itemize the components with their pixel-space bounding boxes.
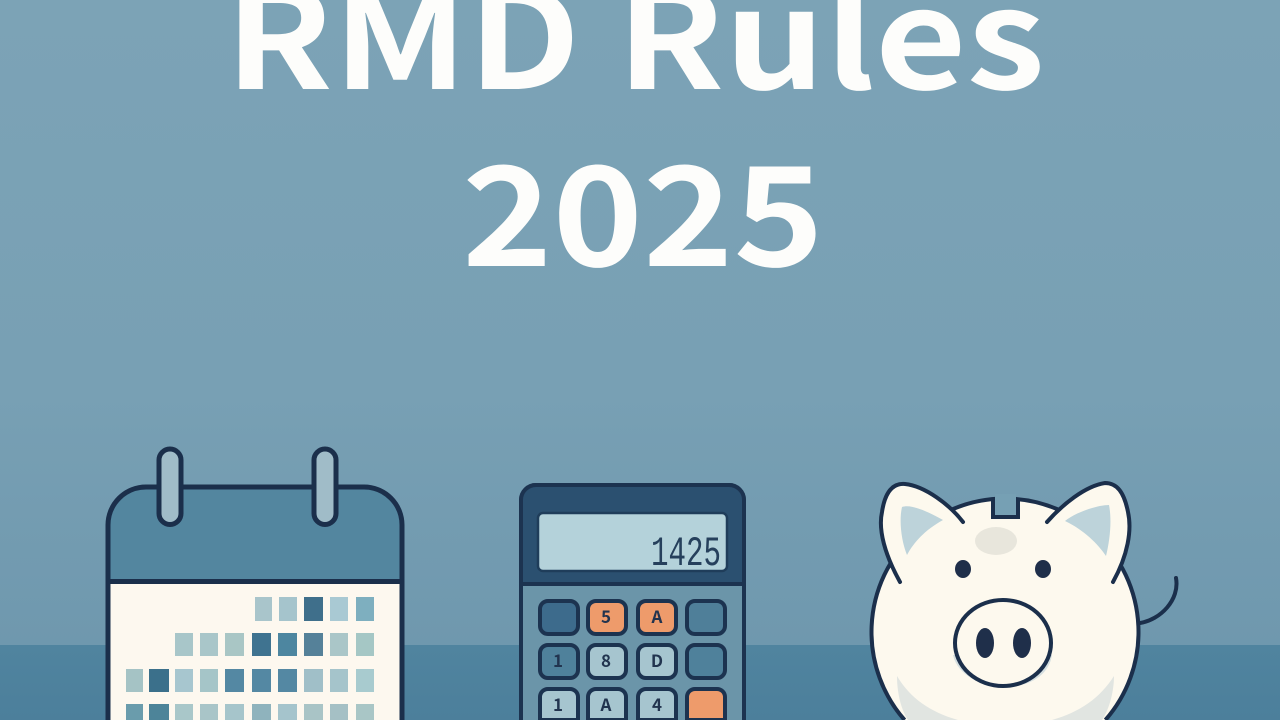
calculator buttons <box>540 601 725 720</box>
icon: piggy bank <box>872 483 1177 720</box>
calculator buttons: A <box>600 691 612 716</box>
calculator buttons: 4 <box>652 691 662 716</box>
calculator buttons: A <box>651 603 663 628</box>
calculator buttons: 1 <box>553 647 563 672</box>
title <box>225 0 1045 306</box>
title: 2025 <box>462 106 824 306</box>
icon: calculator <box>521 485 744 720</box>
calculator buttons: 1 <box>553 691 563 716</box>
pig eyes <box>955 560 1051 578</box>
pig ears <box>881 484 1000 640</box>
pig snout <box>953 600 1052 687</box>
pig body <box>872 499 1138 720</box>
calculator buttons: 8 <box>601 647 611 672</box>
calculator display: 1425 <box>651 530 721 578</box>
coin slot <box>995 494 1016 515</box>
calculator buttons: D <box>651 647 663 672</box>
pig tail <box>1140 578 1177 623</box>
calculator buttons: 5 <box>601 603 611 628</box>
calculator display <box>538 513 727 578</box>
icon: calendar <box>108 449 402 720</box>
